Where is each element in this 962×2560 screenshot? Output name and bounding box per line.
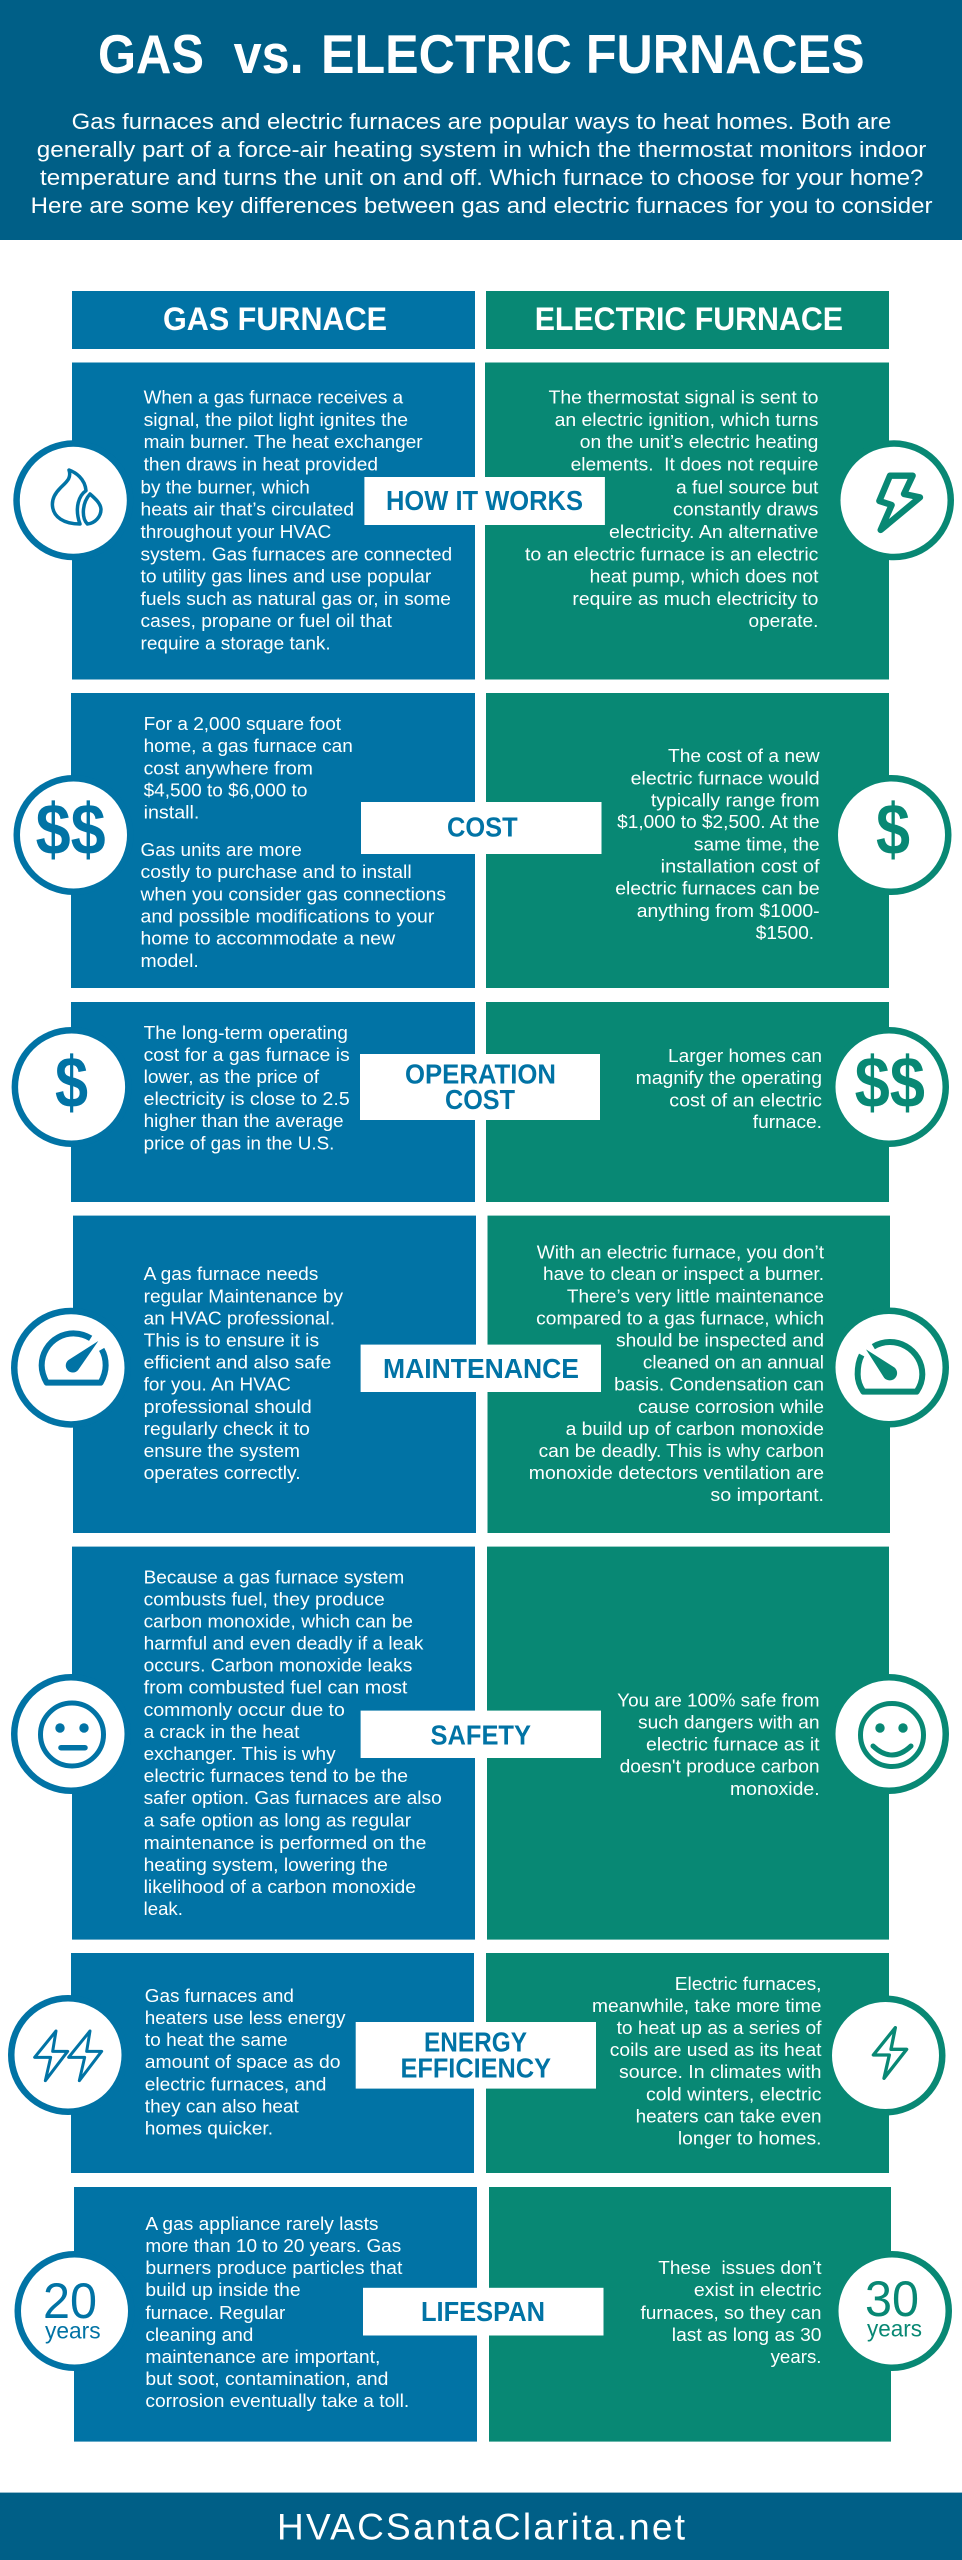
text: electric lifespan: exist in electric — [694, 2280, 822, 2300]
text: gas maintenance: professional should — [144, 1397, 312, 1417]
text: gas lifespan: but soot, contamination, and — [145, 2369, 388, 2389]
text: gas how it works: to utility gas lines and use popular — [140, 567, 431, 587]
text: gas maintenance: A gas furnace needs — [144, 1264, 318, 1284]
panel: gas energy efficiency — [71, 1953, 474, 2173]
text: electric energy efficiency: meanwhile, take more time — [592, 1996, 822, 2016]
badge: 30 years — [832, 2251, 952, 2371]
footer banner — [0, 2493, 962, 2560]
text: electric cost — [615, 746, 821, 943]
label: cost: COST — [447, 811, 518, 842]
icon: neutral face — [11, 1674, 131, 1794]
text: gas safety: heating system, lowering the — [144, 1855, 388, 1875]
text: gas how it works: require a storage tank. — [140, 634, 331, 654]
icon: double dollar — [829, 1027, 949, 1147]
text: gas lifespan: burners produce particles that — [145, 2258, 402, 2278]
text: gas safety: from combusted fuel can most — [144, 1678, 407, 1698]
panel: electric lifespan — [489, 2187, 891, 2442]
text: electric lifespan: furnaces, so they can — [640, 2303, 822, 2323]
text: gas cost: cost anywhere from — [144, 758, 313, 778]
intro paragraph — [31, 109, 933, 218]
text: electric cost: electric furnace would — [631, 768, 820, 788]
text: electric maintenance: cause corrosion while — [638, 1397, 824, 1417]
text: gas how it works: When a gas furnace receives a — [144, 388, 404, 408]
text: electric maintenance: should be inspected and — [616, 1330, 824, 1350]
panel: electric cost — [486, 693, 889, 988]
icon: single outline bolt — [826, 1996, 946, 2116]
text: gas energy efficiency — [145, 1986, 345, 2139]
text: electric lifespan: last as long as 30 — [672, 2325, 822, 2345]
icon: solid lightning bolt — [834, 440, 954, 560]
text: gas cost: install. — [144, 803, 199, 823]
icon: double dollar: $$ — [855, 1043, 925, 1123]
icon: flame — [13, 440, 133, 560]
label: maintenance — [361, 1345, 601, 1392]
title: GAS — [98, 23, 204, 85]
text: electric cost: $1,000 to $2,500. At the — [617, 812, 820, 832]
column heading: gas furnace: GAS FURNACE — [163, 301, 387, 337]
label: safety — [361, 1711, 601, 1758]
text: gas cost: when you consider gas connections — [139, 884, 446, 904]
text: electric maintenance: With an electric furnace, you don’t — [537, 1242, 824, 1262]
text: gas how it works: fuels such as natural gas or, in some — [140, 589, 451, 609]
text: electric energy efficiency: cold winters, electric — [646, 2084, 822, 2104]
text: gas safety: occurs. Carbon monoxide leaks — [144, 1656, 412, 1676]
text: gas safety: a safe option as long as regular — [144, 1811, 411, 1831]
icon: gauge left — [11, 1308, 131, 1428]
icon: double outline bolt — [8, 1995, 128, 2115]
text: electric operation cost: magnify the operating — [636, 1068, 822, 1088]
text: gas safety: combusts fuel, they produce — [144, 1589, 385, 1609]
label: energy efficiency: EFFICIENCY — [400, 2052, 551, 2084]
text: electric cost: same time, the — [694, 834, 820, 854]
text: gas how it works: system. Gas furnaces are connected — [140, 544, 452, 564]
text: gas cost: and possible modifications to your — [140, 906, 434, 926]
text: gas safety: commonly occur due to — [144, 1700, 345, 1720]
label: energy efficiency: ENERGY — [424, 2026, 527, 2057]
text: gas cost: home to accommodate a new — [140, 929, 396, 949]
text: electric safety: doesn't produce carbon — [620, 1756, 820, 1776]
panel: electric operation cost — [486, 1002, 889, 1202]
text: gas lifespan: furnace. Regular — [145, 2303, 285, 2323]
text: gas safety: safer option. Gas furnaces are also — [144, 1788, 442, 1808]
text: gas operation cost: higher than the average — [144, 1111, 344, 1131]
label: how it works: HOW IT WORKS — [386, 485, 583, 516]
text: gas safety: maintenance is performed on the — [144, 1833, 426, 1853]
header banner — [0, 0, 962, 240]
text: gas energy efficiency: amount of space as do — [145, 2052, 340, 2072]
label: maintenance: MAINTENANCE — [383, 1353, 579, 1384]
text: gas safety: electric furnaces tend to be the — [144, 1766, 408, 1786]
text: gas lifespan: A gas appliance rarely lasts — [145, 2214, 378, 2234]
text: electric how it works: operate. — [748, 611, 818, 631]
label: lifespan: LIFESPAN — [421, 2296, 545, 2327]
text: gas lifespan — [145, 2214, 409, 2411]
text: electric cost: anything from $1000- — [637, 901, 820, 921]
text: electric safety: monoxide. — [730, 1779, 820, 1799]
text: gas maintenance: regularly check it to — [144, 1419, 310, 1439]
text: electric energy efficiency: longer to homes. — [678, 2128, 822, 2148]
text: gas cost: For a 2,000 square foot — [144, 714, 341, 734]
text: gas lifespan: corrosion eventually take a toll. — [145, 2391, 409, 2411]
text: electric safety: You are 100% safe from — [617, 1690, 820, 1710]
text: gas maintenance: an HVAC professional. — [144, 1308, 335, 1328]
text: gas energy efficiency: they can also heat — [145, 2097, 299, 2117]
text: gas energy efficiency: heaters use less energy — [145, 2008, 345, 2028]
text: electric maintenance: a build up of carbon monoxide — [566, 1419, 824, 1439]
panel: electric safety — [487, 1547, 889, 1940]
text: gas how it works: main burner. The heat exchanger — [144, 432, 423, 452]
text: gas maintenance: ensure the system — [144, 1441, 300, 1461]
column heading: electric furnace — [486, 291, 889, 349]
text: electric energy efficiency: to heat up as a series of — [617, 2018, 823, 2038]
text: electric maintenance: so important. — [710, 1485, 824, 1505]
text: gas maintenance — [144, 1264, 343, 1483]
label: safety: SAFETY — [430, 1720, 531, 1750]
text: gas safety: exchanger. This is why — [144, 1744, 336, 1764]
footer banner: HVACSantaClarita.net — [277, 2507, 686, 2548]
text: electric how it works: The thermostat signal is sent to — [548, 388, 818, 408]
text: electric operation cost: cost of an electric — [669, 1090, 822, 1110]
row: how it works — [13, 362, 954, 680]
text: electric cost: typically range from — [651, 790, 820, 810]
row: operation cost — [12, 1002, 949, 1202]
text: gas how it works — [140, 388, 452, 654]
text: electric cost: $1500. — [756, 923, 814, 943]
text: electric how it works: to an electric furnace is an electric — [525, 544, 818, 564]
text: gas maintenance: for you. An HVAC — [144, 1374, 291, 1394]
icon: single dollar: $ — [876, 790, 910, 870]
text: electric how it works: an electric ignition, which turns — [555, 410, 818, 430]
text: electric lifespan — [640, 2258, 822, 2367]
icon: gauge right — [829, 1308, 949, 1428]
text: electric how it works: heat pump, which does not — [590, 567, 818, 587]
text: electric cost: The cost of a new — [668, 746, 821, 766]
text: gas operation cost — [144, 1023, 350, 1153]
column heading: gas furnace — [72, 291, 475, 349]
label: operation cost — [360, 1054, 600, 1120]
text: gas safety: a crack in the heat — [144, 1722, 299, 1742]
text: gas operation cost: lower, as the price of — [144, 1067, 320, 1087]
row: maintenance — [11, 1216, 949, 1533]
text: electric maintenance: monoxide detectors ventilation are — [529, 1463, 824, 1483]
row: lifespan — [14, 2187, 952, 2442]
text: electric safety: such dangers with an — [638, 1712, 820, 1732]
text: gas lifespan: cleaning and — [145, 2325, 253, 2345]
text: electric operation cost: Larger homes can — [668, 1046, 822, 1066]
text: electric maintenance: There’s very little maintenance — [567, 1286, 824, 1306]
badge: 30 years: years — [867, 2315, 922, 2341]
icon: single dollar: $ — [55, 1043, 88, 1123]
text: electric how it works: on the unit’s electric heating — [580, 432, 818, 452]
icon: double dollar: $$ — [36, 790, 106, 870]
text: electric operation cost — [636, 1046, 822, 1132]
text: electric energy efficiency: heaters can take even — [636, 2106, 822, 2126]
text: gas maintenance: efficient and also safe — [144, 1352, 331, 1372]
text: electric energy efficiency: Electric furnaces, — [675, 1974, 822, 1994]
text: gas cost: $4,500 to $6,000 to — [144, 780, 307, 800]
label: how it works — [364, 477, 605, 525]
text: gas operation cost: electricity is close to 2.5 — [144, 1089, 350, 1109]
text: electric how it works: electricity. An alternative — [609, 522, 818, 542]
text: electric how it works: constantly draws — [673, 500, 818, 520]
text: electric lifespan: These issues don’t — [658, 2258, 822, 2278]
text: electric cost: installation cost of — [661, 856, 821, 876]
text: gas operation cost: The long-term operating — [144, 1023, 348, 1043]
label: cost — [361, 802, 602, 854]
label: operation cost: OPERATION — [405, 1059, 556, 1090]
text: electric maintenance: cleaned on an annual — [643, 1352, 824, 1372]
text: gas operation cost: price of gas in the U.S. — [144, 1133, 334, 1153]
text: gas safety: likelihood of a carbon monoxide — [144, 1877, 416, 1897]
text: electric maintenance — [529, 1242, 824, 1505]
text: electric maintenance: can be deadly. This is why carbon — [539, 1441, 824, 1461]
text: gas maintenance: This is to ensure it is — [144, 1330, 319, 1350]
text: gas safety: carbon monoxide, which can be — [144, 1612, 413, 1632]
icon: single dollar — [12, 1027, 132, 1147]
row: energy efficiency — [8, 1953, 946, 2173]
text: electric maintenance: basis. Condensation can — [614, 1374, 824, 1394]
intro paragraph: Here are some key differences between gas and electric furnaces for you to consider — [31, 193, 933, 218]
text: gas cost: costly to purchase and to install — [140, 862, 412, 882]
text: gas lifespan: maintenance are important, — [145, 2347, 380, 2367]
panel: electric maintenance — [488, 1216, 890, 1533]
text: electric cost: electric furnaces can be — [615, 879, 820, 899]
text: electric how it works: elements. It does not require — [571, 454, 818, 474]
text: gas how it works: then draws in heat provided — [144, 454, 378, 474]
text: gas how it works: signal, the pilot light ignites the — [144, 410, 408, 430]
text: gas operation cost: cost for a gas furnace is — [144, 1045, 350, 1065]
panel: gas maintenance — [73, 1216, 476, 1533]
row: safety — [11, 1547, 949, 1940]
text: gas how it works: by the burner, which — [140, 477, 310, 497]
text: gas energy efficiency: electric furnaces, and — [145, 2075, 326, 2095]
panel: electric how it works — [485, 362, 889, 680]
panel: gas operation cost — [71, 1002, 475, 1202]
text: gas maintenance: regular Maintenance by — [144, 1286, 343, 1306]
text: gas safety: leak. — [144, 1899, 183, 1919]
label: lifespan — [363, 2288, 604, 2336]
text: electric how it works — [525, 388, 818, 631]
badge: 20 years — [14, 2251, 134, 2371]
text: gas lifespan: build up inside the — [145, 2280, 301, 2300]
text: electric energy efficiency: coils are used as its heat — [610, 2040, 822, 2060]
panel: gas safety — [72, 1547, 475, 1940]
text: gas energy efficiency: homes quicker. — [145, 2119, 273, 2139]
text: gas how it works: cases, propane or fuel oil that — [140, 611, 392, 631]
text: gas cost: model. — [140, 951, 199, 971]
badge: 30 years: 30 — [865, 2271, 919, 2327]
text: gas how it works: throughout your HVAC — [140, 522, 331, 542]
text: electric how it works: require as much electricity to — [572, 589, 818, 609]
icon: double dollar — [14, 775, 134, 895]
intro paragraph: generally part of a force-air heating system in which the thermostat monitors indoor — [37, 137, 927, 162]
panel: gas lifespan — [74, 2187, 477, 2442]
text: gas energy efficiency: to heat the same — [145, 2030, 288, 2050]
panel: gas how it works — [72, 362, 475, 680]
text: gas safety: Because a gas furnace system — [144, 1567, 404, 1587]
text: gas maintenance: operates correctly. — [144, 1463, 301, 1483]
text: gas lifespan: more than 10 to 20 years. Gas — [145, 2236, 401, 2256]
text: electric safety: electric furnace as it — [646, 1734, 820, 1754]
text: electric safety — [617, 1690, 820, 1799]
text: electric maintenance: compared to a gas furnace, which — [536, 1308, 824, 1328]
title: ELECTRIC FURNACES — [321, 23, 865, 85]
badge: 20 years: 20 — [43, 2273, 97, 2329]
panel: electric energy efficiency — [486, 1953, 889, 2173]
text: electric energy efficiency: source. In climates with — [619, 2062, 822, 2082]
title: vs. — [234, 23, 304, 85]
icon: single dollar — [832, 775, 952, 895]
text: gas cost: home, a gas furnace can — [144, 736, 353, 756]
intro paragraph: Gas furnaces and electric furnaces are popular ways to heat homes. Both are — [72, 109, 891, 134]
icon: smiling face — [829, 1674, 949, 1794]
label: operation cost: COST — [445, 1084, 515, 1115]
text: electric maintenance: have to clean or inspect a burner. — [543, 1264, 824, 1284]
column heading: electric furnace: ELECTRIC FURNACE — [535, 301, 843, 337]
title — [98, 23, 865, 85]
text: electric energy efficiency — [592, 1974, 823, 2148]
text: electric lifespan: years. — [771, 2347, 822, 2367]
text: gas how it works: heats air that’s circulated — [140, 500, 354, 520]
text: gas cost: Gas units are more — [140, 840, 302, 860]
text: electric operation cost: furnace. — [753, 1112, 822, 1132]
text: gas safety — [144, 1567, 442, 1919]
text: gas cost — [139, 714, 446, 971]
text: electric how it works: a fuel source but — [676, 477, 818, 497]
row: cost — [14, 693, 952, 988]
badge: 20 years: years — [45, 2317, 101, 2343]
label: energy efficiency — [356, 2022, 596, 2089]
text: gas safety: harmful and even deadly if a leak — [144, 1634, 424, 1654]
text: gas energy efficiency: Gas furnaces and — [145, 1986, 294, 2006]
panel: gas cost — [71, 693, 475, 988]
intro paragraph: temperature and turns the unit on and off. Which furnace to choose for your home? — [40, 165, 923, 190]
